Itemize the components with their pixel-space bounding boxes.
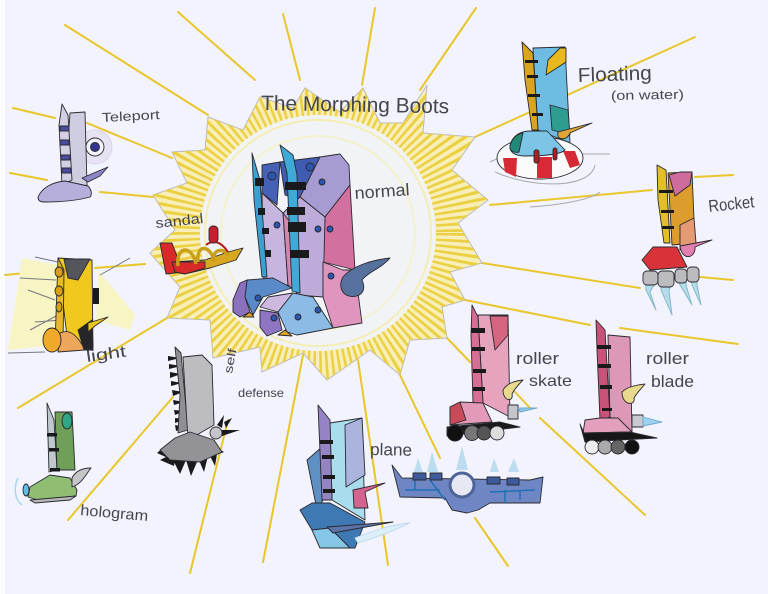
boot: sandal: [160, 226, 243, 274]
label: self defense: [221, 347, 284, 400]
boot: teleport: [38, 104, 112, 202]
boot: normal: [233, 145, 390, 336]
boot: floating: [490, 42, 610, 207]
boot: roller skate: [447, 305, 537, 441]
label: floating: Floating: [577, 62, 652, 87]
boot: rocket: [642, 165, 712, 315]
label: self defense: self: [221, 347, 239, 375]
boot: plane: [300, 405, 410, 548]
label: self defense: defense: [238, 386, 284, 400]
boot: hologram: [15, 403, 91, 505]
label: light: light: [85, 343, 128, 366]
plane wing: [392, 446, 543, 513]
boot: roller blade: [580, 320, 662, 454]
label: roller blade: [646, 349, 694, 391]
label: roller blade: roller: [646, 349, 689, 368]
label: plane: plane: [370, 440, 412, 460]
label: floating: (on water): [611, 87, 684, 103]
title: The Morphing Boots: [261, 92, 449, 118]
boot: light: [8, 257, 135, 353]
label: hologram: hologram: [80, 502, 149, 525]
label: teleport: Teleport: [101, 107, 161, 125]
label: roller skate: [516, 349, 572, 390]
label: roller blade: blade: [651, 372, 694, 391]
sun: [150, 83, 488, 383]
label: roller skate: skate: [529, 373, 572, 390]
label: floating: [577, 62, 684, 103]
boot: self defense: [157, 347, 240, 476]
label: roller skate: roller: [516, 349, 559, 368]
label: normal: normal: [354, 180, 410, 203]
label: sandal: sandal: [155, 210, 204, 231]
label: rocket: Rocket: [707, 192, 755, 216]
